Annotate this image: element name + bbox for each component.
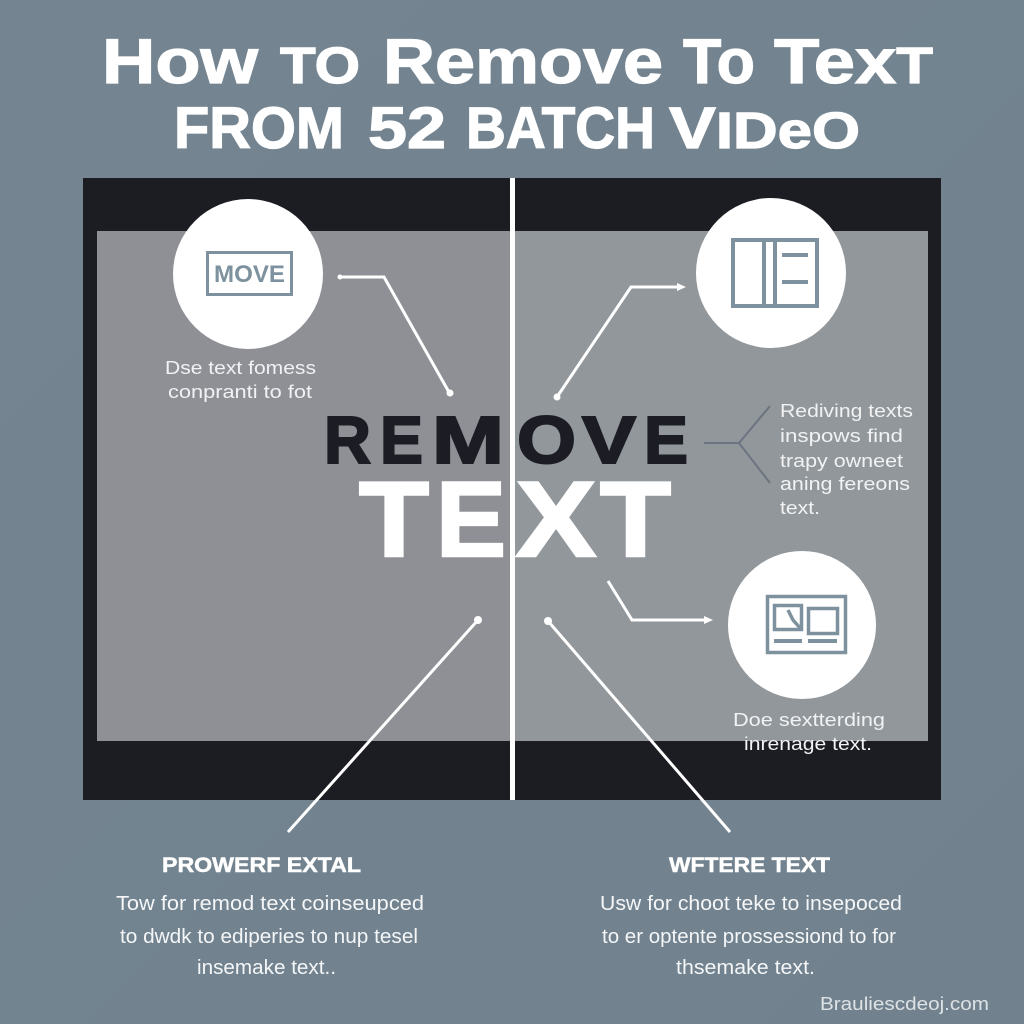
text block: bottom left: to dwdk to ediperies to nup tesel xyxy=(120,926,418,948)
title: BATCH xyxy=(466,96,655,161)
text block: bottom left: insemake text.. xyxy=(197,957,336,979)
arrow: lower right xyxy=(608,581,713,624)
text block: bottom right: thsemake text. xyxy=(676,957,815,979)
heading: remove: V xyxy=(582,403,636,478)
arrow: branching connector xyxy=(704,406,770,483)
heading: remove xyxy=(324,403,688,478)
text block: lower right caption xyxy=(733,710,885,754)
text block: bottom right: to er optente prossessiond to for xyxy=(602,926,896,948)
text block: top left caption: conpranti to fot xyxy=(168,382,312,402)
text block: right caption: aning fereons xyxy=(780,474,910,494)
title: FROM xyxy=(174,96,344,161)
text block: right caption: inspows find xyxy=(780,426,903,446)
heading: text: T xyxy=(600,459,671,579)
icon: move label circle xyxy=(173,199,323,349)
heading: remove: R xyxy=(324,403,371,478)
title xyxy=(102,27,933,161)
text block: bottom left: Tow for remod text coinseupced xyxy=(116,893,424,915)
text block: right caption: Rediving texts xyxy=(780,401,913,421)
text block: lower right caption: inrenage text. xyxy=(744,734,872,754)
heading: text: X xyxy=(516,459,596,579)
text block: bottom left xyxy=(116,854,424,979)
heading: remove: E xyxy=(644,403,688,478)
text block: top left caption xyxy=(165,358,316,402)
title: How xyxy=(102,27,259,97)
heading: remove: M xyxy=(432,403,504,478)
title: To xyxy=(683,27,755,97)
text block: right caption: text. xyxy=(780,498,820,518)
arrow: top left xyxy=(338,274,454,396)
arrow: bottom left leader xyxy=(288,616,482,832)
text block: top left caption: Dse text fomess xyxy=(165,358,316,378)
text block: bottom right: Usw for choot teke to insepoced xyxy=(600,893,902,915)
footer url: Brauliescdeoj.com xyxy=(820,994,989,1014)
title: 52 xyxy=(368,96,446,161)
heading: remove: O xyxy=(517,403,576,478)
arrow: top right xyxy=(554,283,686,400)
title: TO xyxy=(280,37,360,94)
text block: bottom right xyxy=(600,854,902,979)
title: VIDeO xyxy=(669,96,860,161)
heading: wftere text: WFTERE TEXT xyxy=(669,854,830,877)
heading: prowerf extal: PROWERF EXTAL xyxy=(162,854,361,877)
title: Remove xyxy=(383,27,663,97)
heading: remove: E xyxy=(380,403,423,478)
icon: media layout circle xyxy=(728,551,876,699)
heading: text xyxy=(359,459,671,579)
icon: move label circle: MOVE xyxy=(214,261,285,288)
heading: text: E xyxy=(436,459,506,579)
title: Tex T xyxy=(774,27,933,97)
text block: right caption: trapy owneet xyxy=(780,451,903,471)
text block: lower right caption: Doe sextterding xyxy=(733,710,885,730)
panel: central comparison frame xyxy=(83,178,941,800)
text block: right caption xyxy=(780,401,913,518)
arrow: bottom right leader xyxy=(544,617,730,832)
icon: book layout circle xyxy=(696,198,846,348)
heading: text: T xyxy=(359,459,429,579)
